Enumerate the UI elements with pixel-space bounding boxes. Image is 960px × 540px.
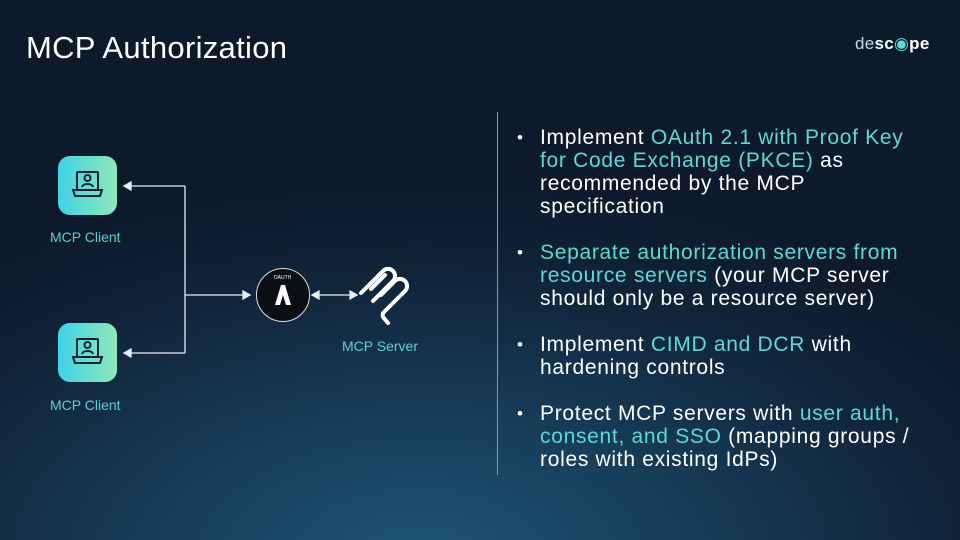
diagram: [50, 156, 418, 413]
icon: OAuth: [256, 268, 310, 322]
bullet list: Implement OAuth 2.1 with Proof Key for Code Exchange (PKCE) as recommended by the MCP specification: [540, 126, 903, 218]
bullet list: Protect MCP servers with user auth, consent, and SSO (mapping groups / roles with existing IdPs): [540, 402, 909, 471]
divider: [497, 112, 498, 475]
bullet list: Separate authorization servers from resource servers (your MCP server should only be a resource server): [540, 241, 898, 310]
label: MCP client 2: MCP Client: [50, 397, 121, 413]
icon: MCP server: [358, 266, 410, 326]
icon: OAuth: OAUTH: [274, 275, 292, 281]
icon: MCP client 2: [58, 323, 117, 382]
label: MCP client 1: MCP Client: [50, 229, 121, 245]
bullet list: Implement CIMD and DCR with hardening controls: [540, 333, 852, 379]
label: MCP server: MCP Server: [342, 338, 418, 354]
title: MCP Authorization: [26, 30, 287, 65]
logo: descope: desc◉pe: [855, 34, 930, 53]
arrows: [122, 180, 358, 358]
bullet list: [518, 126, 909, 471]
icon: MCP client 1: [58, 156, 117, 215]
